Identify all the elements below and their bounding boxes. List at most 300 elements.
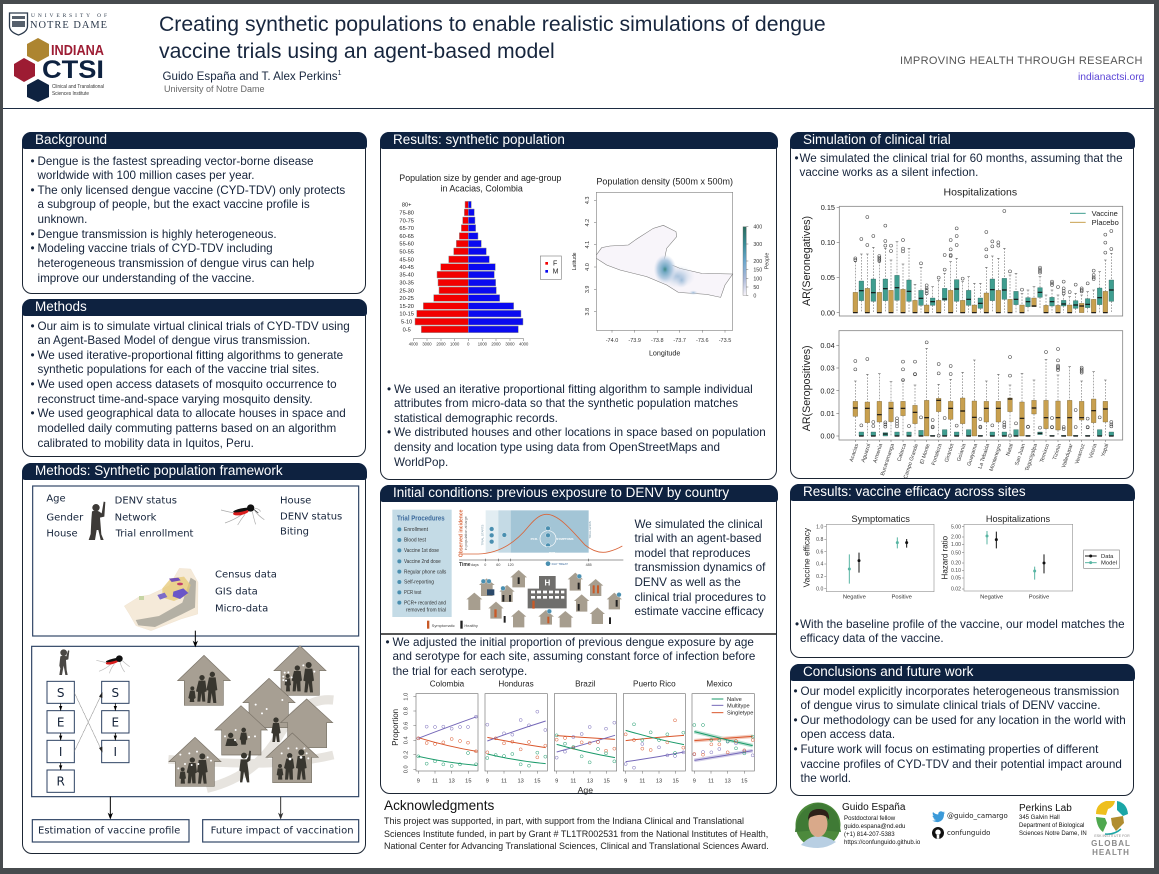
heading: methods: [22, 298, 366, 316]
houses: [169, 646, 333, 786]
panel: background: •: [30, 184, 35, 197]
panel: background: [22, 132, 366, 294]
boxplot legend: [1070, 209, 1119, 227]
x axis labels: 9: [417, 779, 420, 785]
x axis labels: Age: [578, 785, 593, 795]
text: background bullets: Dengue transmission is highly heterogeneous.: [38, 228, 277, 241]
site labels: Natal: [1005, 443, 1015, 457]
text: exposure adjustment: the trial for each serotype.: [392, 665, 527, 678]
heading: conclusions: Conclusions and future work: [803, 664, 973, 678]
frame and axis: 0.00: [821, 308, 835, 317]
contact: Guido España: [842, 802, 920, 846]
whiskers: [854, 348, 1107, 436]
incidence timeline: [458, 509, 622, 557]
y axis: 1.0: [404, 693, 410, 701]
y axis: 0.6: [404, 722, 410, 730]
text: results bullets: attributes from micro-data so that the synthetic population matches: [394, 397, 738, 410]
panel: methods: •: [30, 349, 35, 362]
data source labels: [215, 570, 277, 615]
site labels: Girardot: [944, 443, 956, 463]
text: trial simulation description: [634, 518, 766, 618]
text: trial simulation description: clinical trial procedures to: [634, 591, 766, 604]
country titles: Colombia: [430, 679, 465, 688]
panel: simulation of clinical trial: [790, 132, 1134, 479]
text: trial simulation description: model that reproduces: [634, 547, 750, 560]
chart: symptomatics: Vaccine efficacy: [802, 527, 812, 587]
whiskers: [854, 242, 1113, 313]
density axes: 4.2: [585, 219, 591, 226]
heading: framework: [22, 462, 366, 480]
logo: University of Notre Dame: [8, 12, 107, 36]
arrow: to future impact: [278, 797, 283, 820]
incidence timeline: PCR-: [531, 537, 538, 541]
density colour bar: 100: [753, 276, 762, 282]
trial procedures list: Blood test: [404, 538, 427, 544]
site labels: Vitoria: [1088, 443, 1099, 459]
age labels: 60-65: [399, 234, 414, 240]
box: future impact of vaccination: [203, 820, 359, 842]
chart: vaccine efficacy and hazard ratio: [802, 514, 1120, 600]
text: conclusions: vaccine profiles of CYD-TDV and their potential impact around: [800, 758, 1122, 771]
frames: [416, 694, 754, 771]
acknowledgments text: [384, 816, 769, 851]
trend lines: singletype: [418, 735, 753, 751]
tagline: IMPROVING HEALTH THROUGH RESEARCH: [900, 55, 1143, 67]
road background: [168, 700, 333, 788]
procedures legend: Symptomatic: [432, 623, 455, 628]
contact: Perkins Lab: Department of Biological: [1019, 823, 1084, 829]
site labels: Montenegro: [989, 443, 1003, 472]
box: future impact of vaccination: Future impact of vaccination: [211, 826, 354, 837]
site labels: San Juan: [1014, 443, 1027, 466]
arrowhead: [193, 641, 198, 647]
vaccine boxes: [859, 275, 1114, 308]
SEIR letters: I: [114, 745, 117, 759]
y axis: Proportion: [391, 709, 400, 746]
pyramid x axis: 4000: [409, 341, 419, 346]
panel: methods synthetic population framework: [22, 463, 366, 854]
data points: multitype: [417, 710, 754, 769]
contact: Guido España: https://confunguido.github.io: [844, 839, 920, 846]
age labels: 45-50: [399, 257, 414, 263]
heading: simulation: Simulation of clinical trial: [803, 132, 951, 146]
heading: conclusions: [790, 664, 1134, 680]
human attributes: Trial enrollment: [115, 529, 194, 540]
density axes: 3.9: [585, 286, 591, 293]
logo: Indiana CTSI: Sciences Institute: [52, 91, 89, 97]
text: trial simulation description: trial with an agent-based: [634, 532, 762, 545]
mosquito attributes: House: [280, 496, 311, 507]
website link: indianactsi.org: [1078, 72, 1144, 83]
text: vaccine efficacy: With the baseline profile of the vaccine, our model matches the: [800, 618, 1125, 630]
human attributes: House: [46, 529, 78, 540]
panel: simulation of clinical trial: •: [794, 152, 799, 164]
age labels: 25-30: [399, 288, 414, 294]
text: background bullets: The only licensed dengue vaccine (CYD-TDV) only protects: [38, 184, 345, 197]
icon: person: [59, 649, 69, 675]
female bars: [415, 201, 468, 333]
github handle: confunguido: [947, 829, 990, 837]
density map: [596, 192, 733, 330]
panel: conclusions: •: [794, 684, 798, 698]
country titles: Mexico: [706, 679, 733, 688]
pyramid x axis: 3000: [505, 341, 515, 346]
site labels: Tizimin: [1052, 443, 1063, 461]
frame and axis: 0.10: [821, 238, 835, 247]
title: vaccine trials using an agent-based model: [159, 40, 555, 62]
density colour bar: 0: [753, 293, 756, 299]
logo: Global Health: ESK INSTITUTE FOR: [1094, 834, 1130, 838]
box: estimation of vaccine profile: [32, 820, 189, 842]
text: conclusions: of dengue virus to simulate clinical trials of DENV vaccine.: [800, 699, 1100, 712]
icon: github: [932, 827, 944, 839]
text: conclusions: Future work will focus on estimating properties of different: [800, 743, 1098, 756]
incidence timeline: PCR+: [549, 551, 557, 555]
vaccine boxes: [859, 430, 1114, 436]
logo: Global Health: [1091, 801, 1131, 857]
frame and axis: [801, 331, 1123, 441]
text: vaccine efficacy: efficacy data of the vaccine.: [800, 632, 944, 645]
icon: mosquito: [96, 655, 130, 673]
x axis labels: 11: [570, 779, 576, 785]
text: methods bullets: an Agent-Based Model of dengue virus transmission.: [38, 334, 310, 347]
y axis: 0.0: [404, 765, 410, 773]
frame and axis: AR(Seronegatives): [801, 216, 813, 306]
contact: Perkins Lab: Perkins Lab: [1019, 802, 1072, 814]
efficacy legend: Model: [1101, 561, 1117, 567]
density axes: [572, 197, 731, 357]
text: results bullets: We distributed houses and other locations in space based on population: [394, 426, 766, 439]
chart: boxplot seronegatives: [801, 186, 1124, 317]
heading: results: Results: synthetic population: [393, 132, 565, 146]
x axis labels: 13: [725, 779, 731, 785]
chart: symptomatics: Symptomatics: [851, 514, 910, 524]
incidence timeline: Observed incidence: [458, 509, 464, 557]
x axis labels: 13: [587, 779, 593, 785]
pyramid legend: F: [553, 261, 557, 268]
text: conclusions: [794, 684, 1126, 785]
diagram: data inputs: [32, 485, 360, 637]
icon: mosquito: [221, 504, 264, 525]
density axes: Latitude: [572, 252, 578, 270]
text: conclusions: Our model explicitly incorporates heterogeneous transmission: [800, 684, 1119, 698]
figure: trial procedures: [392, 509, 624, 629]
trial procedures list: Regular phone calls: [404, 569, 447, 575]
chart: boxplot seropositives: [801, 330, 1124, 480]
country titles: [430, 679, 733, 688]
text: background bullets: heterogeneous transmission of dengue virus can help: [38, 257, 314, 270]
country titles: Honduras: [498, 679, 534, 688]
density colour bar: [743, 225, 770, 299]
SEIR letters: E: [57, 715, 64, 729]
trial procedures list: PCR+ recorded and: [404, 600, 446, 606]
country titles: Puerto Rico: [633, 679, 676, 688]
arrow: data to model: [194, 631, 197, 646]
x axis labels: 9: [555, 779, 558, 785]
photo: Guido España: [795, 802, 841, 848]
diagram: SEIR model and households: [31, 630, 360, 843]
acknowledgments text: National Center for Advancing Translational Sciences, Clinical and Translational Sciences Award.: [384, 841, 769, 851]
age labels: 40-45: [399, 265, 414, 271]
SEIR boxes: [47, 681, 129, 792]
SEIR letters: I: [59, 745, 62, 759]
acknowledgments heading: Acknowledgments: [384, 798, 494, 812]
panel: background: •: [30, 242, 35, 255]
chart: hospitalizations hazard ratio: [941, 514, 1073, 600]
site labels: Aguazul: [861, 443, 872, 463]
exposure legend: Naïve: [727, 697, 742, 703]
density axes: 4.3: [585, 197, 591, 204]
header rule: [3, 108, 1154, 109]
text: conclusions: the world.: [800, 772, 851, 785]
chart: symptomatics: Negative: [843, 594, 866, 600]
chart: hospitalizations hazard ratio: Positive: [1029, 594, 1049, 600]
affiliation: University of Notre Dame: [164, 84, 265, 94]
text: background bullets: worldwide with 100 million cases per year.: [38, 169, 255, 182]
pyramid x axis: 1000: [478, 341, 488, 346]
heading: methods: Methods: [35, 298, 87, 314]
hospital: H: [544, 578, 550, 587]
text: results bullets: density and location type using data from OpenStreetMaps and: [394, 441, 720, 454]
age labels: 70-75: [399, 218, 414, 224]
icon: person silhouette: [89, 502, 105, 540]
age labels: 0-5: [403, 327, 411, 333]
heading: vaccine efficacy: Results: vaccine efficacy across sites: [803, 484, 1026, 498]
village people: [481, 574, 621, 624]
logo: Global Health: GLOBAL: [1091, 839, 1131, 848]
mosquito attributes: Biting: [280, 527, 309, 538]
SEIR letters: S: [112, 686, 119, 700]
logo: Indiana CTSI: [14, 38, 104, 102]
panel: methods: •: [30, 320, 35, 332]
incidence timeline: SYMPTOMS: [556, 537, 573, 541]
panel: results synthetic population: •: [387, 426, 391, 439]
text: methods bullets: reconstruct time-and-space varying mosquito density.: [38, 393, 313, 406]
medians: [853, 399, 1114, 436]
contact: Guido España: guido.espana@nd.edu: [844, 823, 905, 830]
age labels: 5-10: [401, 320, 412, 326]
density colour bar: 300: [753, 242, 762, 248]
age labels: 30-35: [399, 281, 414, 287]
time axis: 485: [586, 563, 592, 567]
human attributes: Gender: [46, 513, 84, 524]
age labels: 75-80: [399, 210, 414, 216]
data source labels: Micro-data: [215, 604, 268, 615]
icon: layered map: [124, 568, 198, 631]
medians: [853, 288, 1114, 313]
exposure legend: [712, 697, 753, 717]
outliers: [854, 341, 1113, 437]
text: background bullets: Dengue is the fastest spreading vector-borne disease: [38, 154, 314, 168]
density title: Population density (500m x 500m): [596, 176, 733, 186]
exposure legend: Singletype: [727, 711, 753, 717]
data source labels: GIS data: [215, 587, 258, 598]
panel: initial conditions: [380, 485, 777, 794]
procedures legend: [427, 621, 478, 629]
density colour bar: 200: [753, 259, 762, 265]
panel: conclusions: •: [794, 743, 798, 756]
density axes: 3.8: [585, 308, 591, 315]
density axes: Longitude: [649, 349, 680, 357]
chart: hospitalizations hazard ratio: 0.50: [951, 550, 961, 556]
age labels: [399, 203, 414, 333]
density axes: -73.7: [673, 338, 686, 344]
text: background bullets: [30, 154, 345, 285]
pyramid x axis: [409, 339, 529, 346]
age labels: 15-20: [399, 304, 414, 310]
x axis labels: [417, 779, 747, 795]
site labels: Armenia: [872, 443, 884, 464]
title: Creating synthetic populations to enable realistic simulations of dengue: [159, 12, 826, 36]
frame and axis: [801, 203, 1123, 317]
heading: framework: Methods: Synthetic population framework: [35, 462, 283, 478]
x axis labels: 9: [693, 779, 696, 785]
panel: results vaccine efficacy: •: [795, 618, 799, 630]
density colour bar: 150: [753, 268, 762, 274]
pyramid x axis: 1000: [450, 341, 460, 346]
acknowledgments text: This project was supported, in part, with support from the Indiana Clinical and Translational: [384, 816, 744, 826]
efficacy legend: [1084, 550, 1119, 568]
chart: hospitalizations hazard ratio: 5.00: [951, 524, 961, 530]
pyramid x axis: 3000: [422, 341, 432, 346]
text: results bullets: [387, 382, 766, 469]
infection dots: [177, 664, 315, 769]
box: estimation of vaccine profile: Estimation of vaccine profile: [38, 826, 180, 837]
heading: initial conditions: Initial conditions: previous exposure to DENV by country: [393, 484, 729, 500]
trial procedures list: Vaccine 2nd dose: [404, 559, 441, 565]
text: methods bullets: Our aim is to simulate virtual clinical trials of CYD-TDV using: [38, 320, 350, 332]
site labels: Yopal: [1100, 443, 1110, 457]
text: vaccine efficacy: [795, 618, 1125, 645]
density axes: -74.0: [606, 338, 618, 344]
text: conclusions: open access data.: [800, 728, 895, 741]
heading: background: Background: [35, 132, 107, 146]
text: exposure adjustment: and serotype for each site, assuming constant force of infection before: [392, 650, 755, 663]
age labels: 65-70: [399, 226, 414, 232]
x axis labels: 11: [432, 779, 438, 785]
density colour bar: 400: [753, 225, 762, 231]
text: trial simulation description: DENV as well as the: [634, 576, 741, 589]
density axes: -73.9: [628, 338, 641, 344]
density axes: -73.5: [719, 338, 731, 344]
site labels: Temixco: [1039, 443, 1051, 464]
SEIR letters: R: [56, 775, 65, 789]
boxplot legend: Placebo: [1092, 218, 1119, 227]
x axis labels: 9: [624, 779, 627, 785]
uncertainty bands: Mexico: [694, 732, 753, 760]
placebo boxes: [853, 288, 1108, 313]
site labels: Bucaramanga: [880, 443, 896, 477]
time axis: Time: [459, 562, 471, 568]
pyramid x axis: 2000: [436, 341, 446, 346]
text: background bullets: unknown.: [38, 213, 87, 226]
divider: [381, 632, 776, 634]
site labels: Calarca: [897, 443, 908, 462]
procedures legend: Healthy: [464, 623, 478, 628]
x axis labels: 11: [639, 779, 645, 785]
frame and axis: 0.04: [820, 341, 835, 350]
trend lines: multitype: [418, 717, 753, 762]
SEIR letters: E: [112, 715, 119, 729]
text: simulation: We simulated the clinical trial for 60 months, assuming that the: [800, 152, 1123, 164]
heading: vaccine efficacy: [790, 484, 1134, 500]
logo: Global Health: HEALTH: [1092, 848, 1130, 857]
SEIR letters: [56, 686, 119, 789]
frame and axis: 0.01: [820, 409, 835, 418]
frame and axis: 0.03: [820, 364, 835, 373]
y axis: 0.2: [404, 751, 410, 759]
logo: University of Notre Dame: UNIVERSITY OF: [31, 13, 107, 19]
time axis: 60: [496, 563, 500, 567]
site labels: La Tebaida: [977, 443, 991, 470]
time axis: days: [471, 563, 479, 567]
boxplot legend: Vaccine: [1092, 209, 1118, 218]
density colour bar: People: [764, 253, 770, 269]
heading: simulation: [790, 132, 1134, 148]
hospital: [528, 576, 567, 608]
panel: conclusions: •: [794, 714, 798, 727]
placebo boxes: [853, 398, 1108, 436]
data points: naive: [417, 723, 754, 768]
trend lines: naive: [418, 730, 753, 765]
site labels: Guayama: [966, 443, 979, 467]
frame and axis: AR(Seropositives): [801, 345, 813, 431]
text: conclusions: Our methodology can be used for any location in the world with: [800, 714, 1126, 727]
pyramid title: Population size by gender and age-group: [399, 173, 561, 183]
site labels: [849, 440, 1110, 480]
pyramid legend: [540, 256, 561, 279]
chart: hospitalizations hazard ratio: 1.00: [951, 542, 961, 548]
text: results bullets: statistical demographic records.: [394, 412, 558, 425]
x axis labels: 15: [465, 779, 471, 785]
frame and axis: 0.05: [821, 273, 835, 282]
time axis: DAY TREAT: [552, 562, 568, 566]
people silhouettes: [179, 662, 314, 784]
mosquito attributes: DENV status: [280, 512, 342, 523]
trial procedures list: Trial Procedures: [397, 516, 445, 523]
age labels: 55-60: [399, 242, 414, 248]
age labels: 50-55: [399, 249, 414, 255]
x axis labels: 15: [604, 779, 610, 785]
panel: methods: [22, 299, 366, 457]
SEIR arrows: [59, 692, 117, 770]
text: results bullets: We used an iterative proportional fitting algorithm to sample individual: [394, 382, 753, 396]
contact: Perkins Lab: Sciences Notre Dame, IN: [1019, 831, 1087, 837]
text: trial simulation description: We simulated the clinical: [634, 518, 763, 530]
logo: University of Notre Dame: NOTRE DAME: [30, 20, 107, 31]
incidence timeline: TRIAL STARTS: [481, 525, 485, 545]
text: exposure adjustment: [386, 636, 755, 678]
x axis labels: 13: [518, 779, 524, 785]
panel: results vaccine efficacy: [790, 484, 1134, 658]
chart: hospitalizations hazard ratio: 0.20: [951, 561, 961, 567]
trial procedures list: PCR test: [404, 590, 422, 596]
age labels: 10-15: [399, 312, 414, 318]
data points: singletype: [417, 719, 754, 759]
density colour bar: 50: [753, 285, 759, 291]
incidence timeline: in population at large: [464, 516, 468, 550]
x axis labels: 13: [449, 779, 455, 785]
trial procedures list: Self-reporting: [404, 580, 434, 586]
text: methods bullets: We used geographical data to allocate houses in space and: [38, 407, 346, 420]
twitter handle: @guido_camargo: [947, 812, 1008, 820]
chart: symptomatics: 0.0: [816, 586, 823, 592]
x axis labels: 15: [741, 779, 747, 785]
data source labels: Census data: [215, 570, 277, 581]
age labels: 80+: [402, 203, 412, 209]
logo: Indiana CTSI: INDIANA: [51, 43, 104, 59]
time axis: 0: [484, 563, 486, 567]
